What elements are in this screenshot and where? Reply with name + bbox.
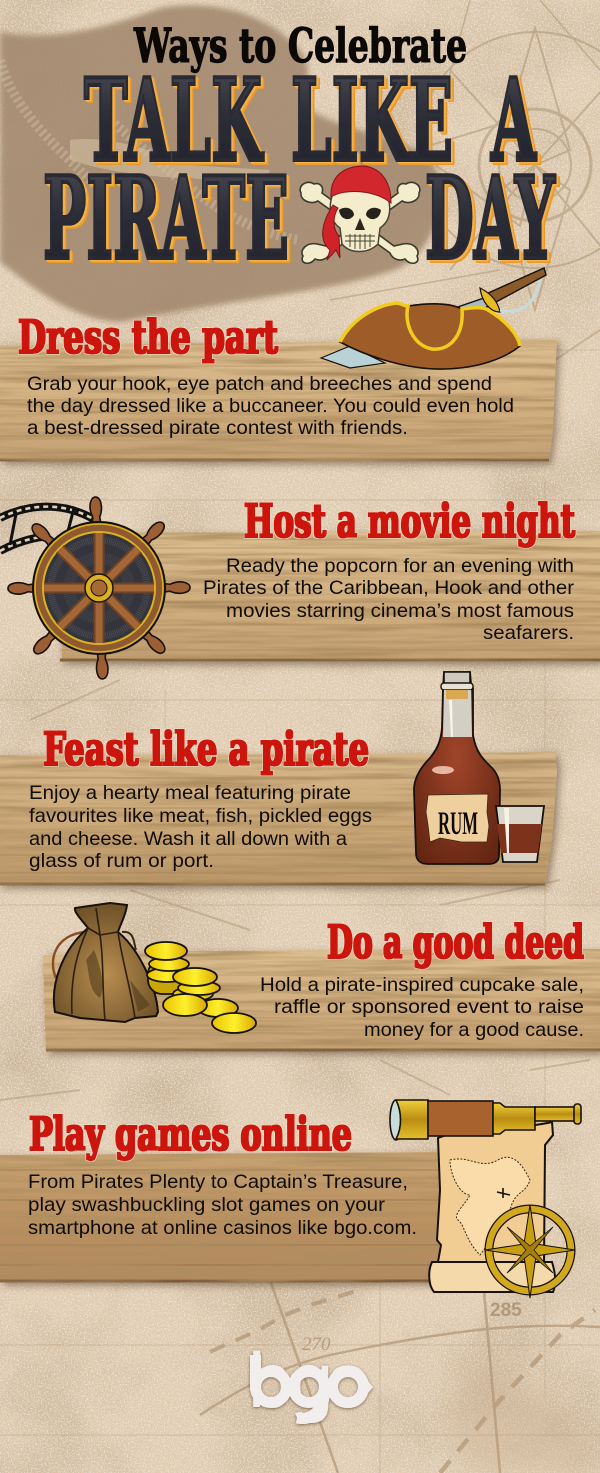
panel: Do a good deed [43,903,600,1052]
body text: the day dressed like a buccaneer. You could even hold [27,395,514,417]
body text: smartphone at online casinos like bgo.com. [28,1217,417,1239]
logo: bgo: bgo [248,1336,369,1424]
body text: Hold a pirate-inspired cupcake sale, [260,974,584,996]
faint map numbers: 285 [490,1300,522,1321]
icon: ship's wheel [8,497,190,679]
heading: Ways to Celebrate: Ways to Celebrate [133,19,467,74]
body text [260,974,584,1041]
body text: and cheese. Wash it all down with a [29,828,347,850]
body text [27,373,514,439]
body text [29,782,372,872]
plank [0,752,557,885]
map wave: dark swath behind title [0,5,440,322]
bandana [331,166,391,203]
body text: Enjoy a hearty meal featuring pirate [29,782,351,804]
heading: Dress the part [18,310,279,364]
body text: a best-dressed pirate contest with friends. [27,417,408,439]
heading: Feast like a pirate [43,722,369,776]
title [43,19,556,285]
body text: Grab your hook, eye patch and breeches and spend [27,373,492,395]
plank [43,949,600,1052]
background: parchment map: 270 [302,1334,331,1355]
body text: money for a good cause. [364,1019,584,1041]
panel: Host a movie night [0,494,600,679]
heading: Talk Like A: A [490,54,537,187]
heading: Talk Like A: LIKE [291,54,453,187]
plank [60,531,600,662]
skull [330,188,390,252]
body text [203,555,575,644]
body text: Pirates of the Caribbean, Hook and other [203,577,575,599]
heading: Pirate Day: PIRATE [43,152,289,285]
map bones shape [70,139,270,185]
icon: gold coins [145,942,256,1033]
panel: Dress the part [0,268,557,462]
panel: Feast like a pirate [0,672,557,885]
plank [0,339,557,462]
plank [0,1152,470,1282]
body text: play swashbuckling slot games on your [28,1194,386,1216]
body text: raffle or sponsored event to raise [274,996,584,1018]
icon: compass rose [485,1205,575,1298]
icon: film strip [0,507,95,551]
rum label text: RUM [438,806,478,842]
icon: skull with crossbones and red bandana [300,166,420,263]
map route lines lower [0,330,600,1473]
heading: Play games online [29,1107,352,1161]
icon: coin pouch [53,903,158,1022]
body text: movies starring cinema’s most famous [226,600,574,622]
icon: spyglass [390,1100,581,1140]
body text: Ready the popcorn for an evening with [226,555,574,577]
icon: rum bottle and glass [414,672,544,864]
body text: favourites like meat, fish, pickled eggs [29,805,372,827]
crossbones [300,182,420,263]
panel: Play games online [0,1100,581,1298]
heading: Talk Like A: TALK [84,54,264,187]
body text [28,1171,417,1239]
compass rose top-right [330,0,600,310]
icon: treasure map scroll [429,1122,555,1292]
icon: tricorn hat and cutlass [321,268,546,369]
body text: glass of rum or port. [29,850,214,872]
body text: seafarers. [483,622,574,644]
body text: From Pirates Plenty to Captain’s Treasure, [28,1171,408,1193]
